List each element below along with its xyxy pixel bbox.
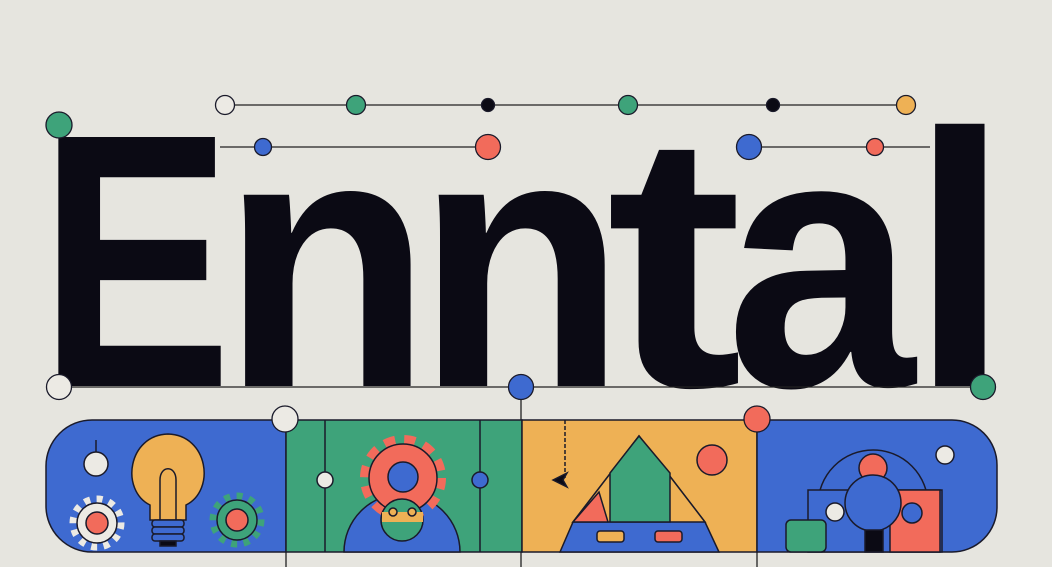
- panel 4: dome: [786, 446, 954, 552]
- title: n: [416, 58, 626, 463]
- panel 3: mountain: [553, 420, 727, 552]
- title: [39, 58, 1010, 463]
- title: n: [221, 58, 432, 463]
- title: l: [910, 58, 1010, 463]
- title: t: [606, 58, 743, 463]
- dots: [46, 96, 996, 432]
- panel 2: gears: [317, 420, 488, 552]
- title: a: [726, 58, 917, 463]
- connector lines with dots: [59, 105, 983, 567]
- panel 1: ideas: [73, 434, 261, 547]
- illustrated band: [46, 420, 997, 552]
- title: E: [39, 58, 232, 463]
